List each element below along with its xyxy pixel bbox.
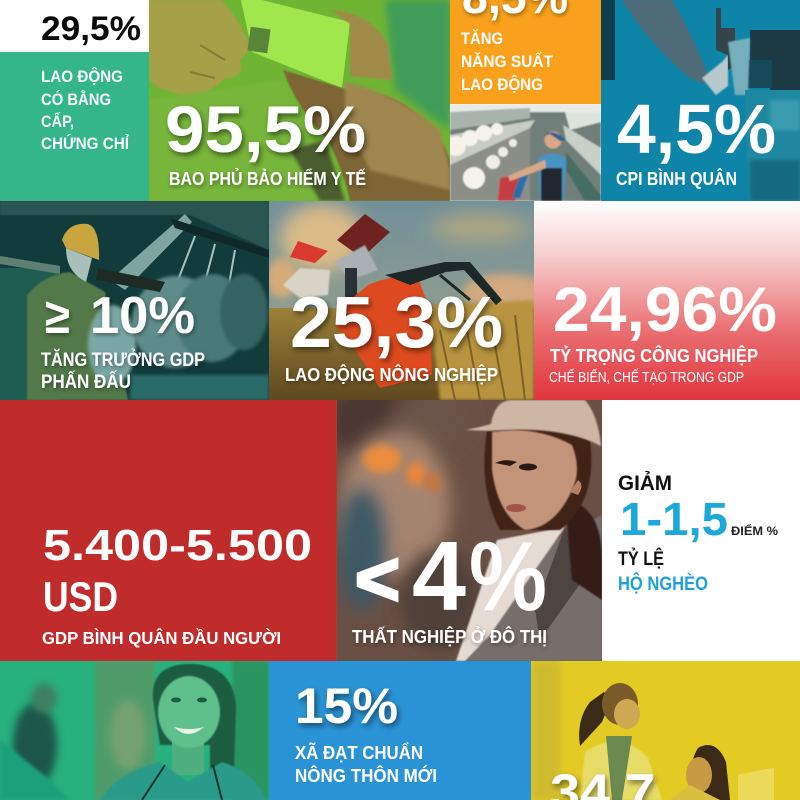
stat: < 4% (355, 521, 547, 631)
label: CPI bình quân: CPI BÌNH QUÂN (616, 168, 737, 189)
stat: 25,3%: 25,3% (290, 283, 503, 363)
sublabel: chế biến, chế tạo trong GDP: CHẾ BIẾN, CHẾ TẠO TRONG GDP (549, 369, 744, 386)
photo: industrial worker with machinery (0, 201, 269, 400)
label: tăng trưởng GDP phấn đấu: PHẤN ĐẤU (41, 371, 131, 393)
label: hộ nghèo: HỘ NGHÈO (618, 573, 708, 595)
label: xã đạt chuẩn nông thôn mới (295, 742, 437, 786)
label: tăng trưởng GDP phấn đấu: TĂNG TRƯỞNG GDP (41, 349, 205, 371)
label: lao động có bằng cấp, chứng chỉ: CHỨNG CHỈ (41, 134, 129, 153)
label: tỷ lệ: TỶ LỆ (618, 548, 664, 570)
panel: 8,5% tăng năng suất lao động (446, 0, 601, 201)
stat: 24,96%: 24,96% (553, 275, 777, 345)
label: tăng trưởng GDP phấn đấu (41, 349, 205, 393)
label: bao phủ bảo hiểm y tế: BAO PHỦ BẢO HIỂM Y TẾ (169, 168, 366, 189)
unit: điểm %: ĐIỂM % (731, 523, 778, 538)
panel: GDP bình quân đầu người (0, 400, 336, 661)
panel: tăng trưởng GDP phấn đấu (0, 201, 269, 400)
photo: hands exchanging insurance card (149, 0, 450, 201)
stat: 1-1,5: 1-1,5 (620, 493, 728, 545)
photo: woman engineer in hard hat (336, 400, 602, 661)
label: xã đạt chuẩn nông thôn mới: NÔNG THÔN MỚI (295, 765, 437, 786)
label: tăng năng suất lao động: NĂNG SUẤT (461, 52, 554, 71)
label: tỷ trọng công nghiệp: TỶ TRỌNG CÔNG NGHIỆP (550, 345, 758, 366)
stat: ≥ 10%: ≥ (45, 288, 70, 344)
panel: nurse photo (0, 661, 269, 800)
label: tăng năng suất lao động (461, 29, 554, 94)
stat: < 4%: < (355, 537, 400, 622)
unit: USD: USD (43, 573, 118, 620)
label: lao động có bằng cấp, chứng chỉ: CÓ BẰNG (41, 90, 111, 109)
label: GDP bình quân đầu người: GDP BÌNH QUÂN ĐẦU NGƯỜI (42, 627, 281, 648)
stat: ≥ 10% (45, 287, 195, 345)
panel: 15% xã đạt chuẩn nông thôn mới (269, 661, 531, 800)
label: giảm: GIẢM (618, 472, 672, 495)
panel: tỷ trọng công nghiệp (534, 201, 800, 400)
photo: red combine harvester in rice field (266, 201, 547, 400)
panel: thất nghiệp ở đô thị (336, 400, 602, 661)
stat: < 4%: % (469, 521, 547, 631)
photo: handshake and city in teal (601, 0, 800, 201)
panel: 95,5% bao phủ bảo hiểm y tế (149, 0, 450, 201)
label: tăng năng suất lao động: TĂNG (461, 29, 503, 48)
panel: lao động nông nghiệp (266, 201, 547, 400)
label: lao động nông nghiệp: LAO ĐỘNG NÔNG NGHIỆP (285, 364, 498, 385)
panel: 29,5% lao động có bằng cấp (0, 10, 149, 201)
stat: 5.400-5.500: 5.400-5.500 (43, 521, 312, 570)
stat: 29,5%: 29,5% (41, 10, 141, 48)
panel: giảm tỷ lệ hộ nghèo (602, 400, 800, 661)
label: lao động có bằng cấp, chứng chỉ: LAO ĐỘNG (41, 67, 123, 86)
stat: 95,5%: 95,5% (165, 92, 366, 166)
label: lao động có bằng cấp, chứng chỉ (41, 67, 129, 153)
label: lao động có bằng cấp, chứng chỉ: CẤP, (41, 112, 74, 131)
label: tăng năng suất lao động: LAO ĐỘNG (461, 75, 543, 94)
panel: 4,5% CPI bình quân (601, 0, 800, 201)
photo: textile factory worker (446, 104, 601, 201)
stat: ≥ 10%: 10% (90, 287, 195, 345)
label: thất nghiệp ở đô thị: THẤT NGHIỆP Ở ĐÔ THỊ (352, 626, 547, 647)
label: xã đạt chuẩn nông thôn mới: XÃ ĐẠT CHUẨN (295, 742, 423, 763)
panel: 34,7 doctor and patient (531, 661, 800, 800)
stat: < 4%: 4 (412, 521, 466, 631)
stat: 15%: 15% (295, 678, 398, 734)
stat: 4,5%: 4,5% (617, 90, 776, 168)
